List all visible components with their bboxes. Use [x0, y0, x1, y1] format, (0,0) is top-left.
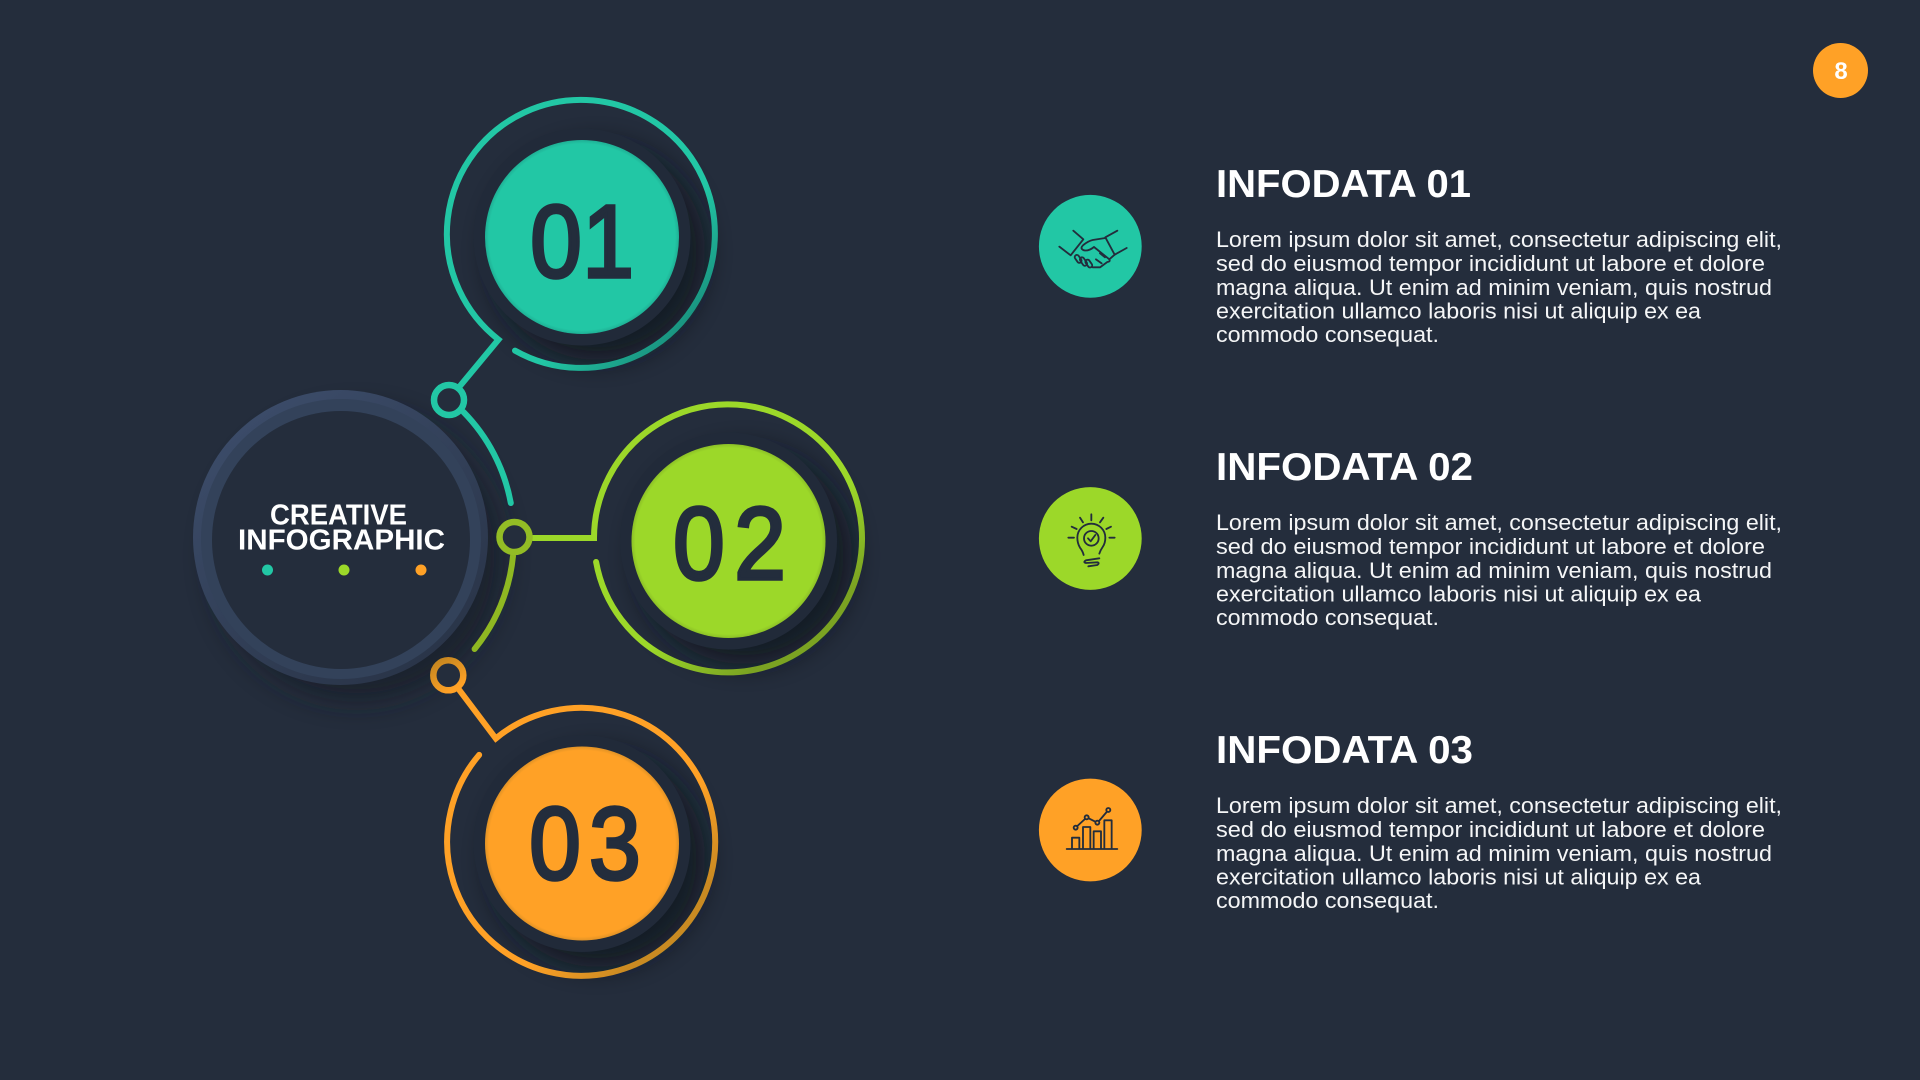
text block: infodata 01	[1216, 163, 1782, 347]
text block: infodata 02	[1216, 446, 1782, 630]
body 03: sed do eiusmod tempor incididunt ut labore et dolore	[1216, 817, 1765, 842]
node 01	[434, 385, 464, 415]
body 01: sed do eiusmod tempor incididunt ut labore et dolore	[1216, 251, 1765, 276]
ring and connector 01	[447, 100, 715, 386]
body 03: magna aliqua. Ut enim ad minim veniam, quis nostrud	[1216, 841, 1772, 866]
text block: infodata 03	[1216, 729, 1782, 913]
heading 01: INFODATA 01	[1216, 163, 1471, 206]
step 01 circle	[447, 100, 715, 386]
connector arc: teal	[464, 412, 511, 503]
page number badge	[1813, 43, 1868, 98]
plate 02	[620, 432, 837, 650]
hub heading: INFOGRAPHIC	[238, 524, 445, 556]
icon: light bulb	[1039, 487, 1142, 590]
hub heading	[238, 500, 445, 556]
ring and connector 03	[447, 690, 715, 976]
body 02: exercitation ullamco laboris nisi ut aliquip ex ea	[1216, 582, 1701, 606]
body 02	[1216, 510, 1782, 630]
heading 03: INFODATA 03	[1216, 729, 1473, 772]
hub colour dots	[262, 564, 426, 576]
body 01: magna aliqua. Ut enim ad minim veniam, quis nostrud	[1216, 275, 1772, 300]
number 01: 01	[530, 183, 634, 299]
body 02: Lorem ipsum dolor sit amet, consectetur adipiscing elit,	[1216, 510, 1782, 535]
number 03: 03	[529, 785, 641, 901]
body 03: Lorem ipsum dolor sit amet, consectetur adipiscing elit,	[1216, 793, 1782, 818]
body 03: exercitation ullamco laboris nisi ut aliquip ex ea	[1216, 864, 1701, 890]
central hub: creative infographic	[193, 390, 503, 702]
body 02: magna aliqua. Ut enim ad minim veniam, quis nostrud	[1216, 558, 1772, 583]
node 03	[433, 660, 463, 690]
icon: bar chart	[1039, 779, 1142, 881]
plate 01	[474, 128, 690, 346]
body 03	[1216, 793, 1782, 913]
disk 02	[632, 444, 826, 638]
hub heading: CREATIVE	[270, 500, 407, 532]
body 03: commodo consequat.	[1216, 888, 1439, 913]
body 01: commodo consequat.	[1216, 322, 1439, 347]
body 01: exercitation ullamco laboris nisi ut aliquip ex ea	[1216, 298, 1701, 324]
icon: handshake	[1039, 195, 1142, 298]
ring and connector 02	[533, 404, 862, 672]
body 02: sed do eiusmod tempor incididunt ut labore et dolore	[1216, 534, 1765, 559]
number 02: 02	[673, 485, 786, 601]
body 02: commodo consequat.	[1216, 605, 1439, 630]
disk 01	[485, 140, 679, 334]
step 02 circle	[533, 404, 862, 672]
plate 03	[474, 735, 690, 952]
step 03 circle	[447, 690, 715, 976]
body 01	[1216, 227, 1782, 347]
body 01: Lorem ipsum dolor sit amet, consectetur adipiscing elit,	[1216, 227, 1782, 252]
node 02	[500, 522, 530, 552]
disk 03	[485, 746, 679, 940]
heading 02: INFODATA 02	[1216, 446, 1473, 489]
page number badge: 8	[1834, 58, 1848, 85]
connector arc: green	[475, 556, 513, 649]
